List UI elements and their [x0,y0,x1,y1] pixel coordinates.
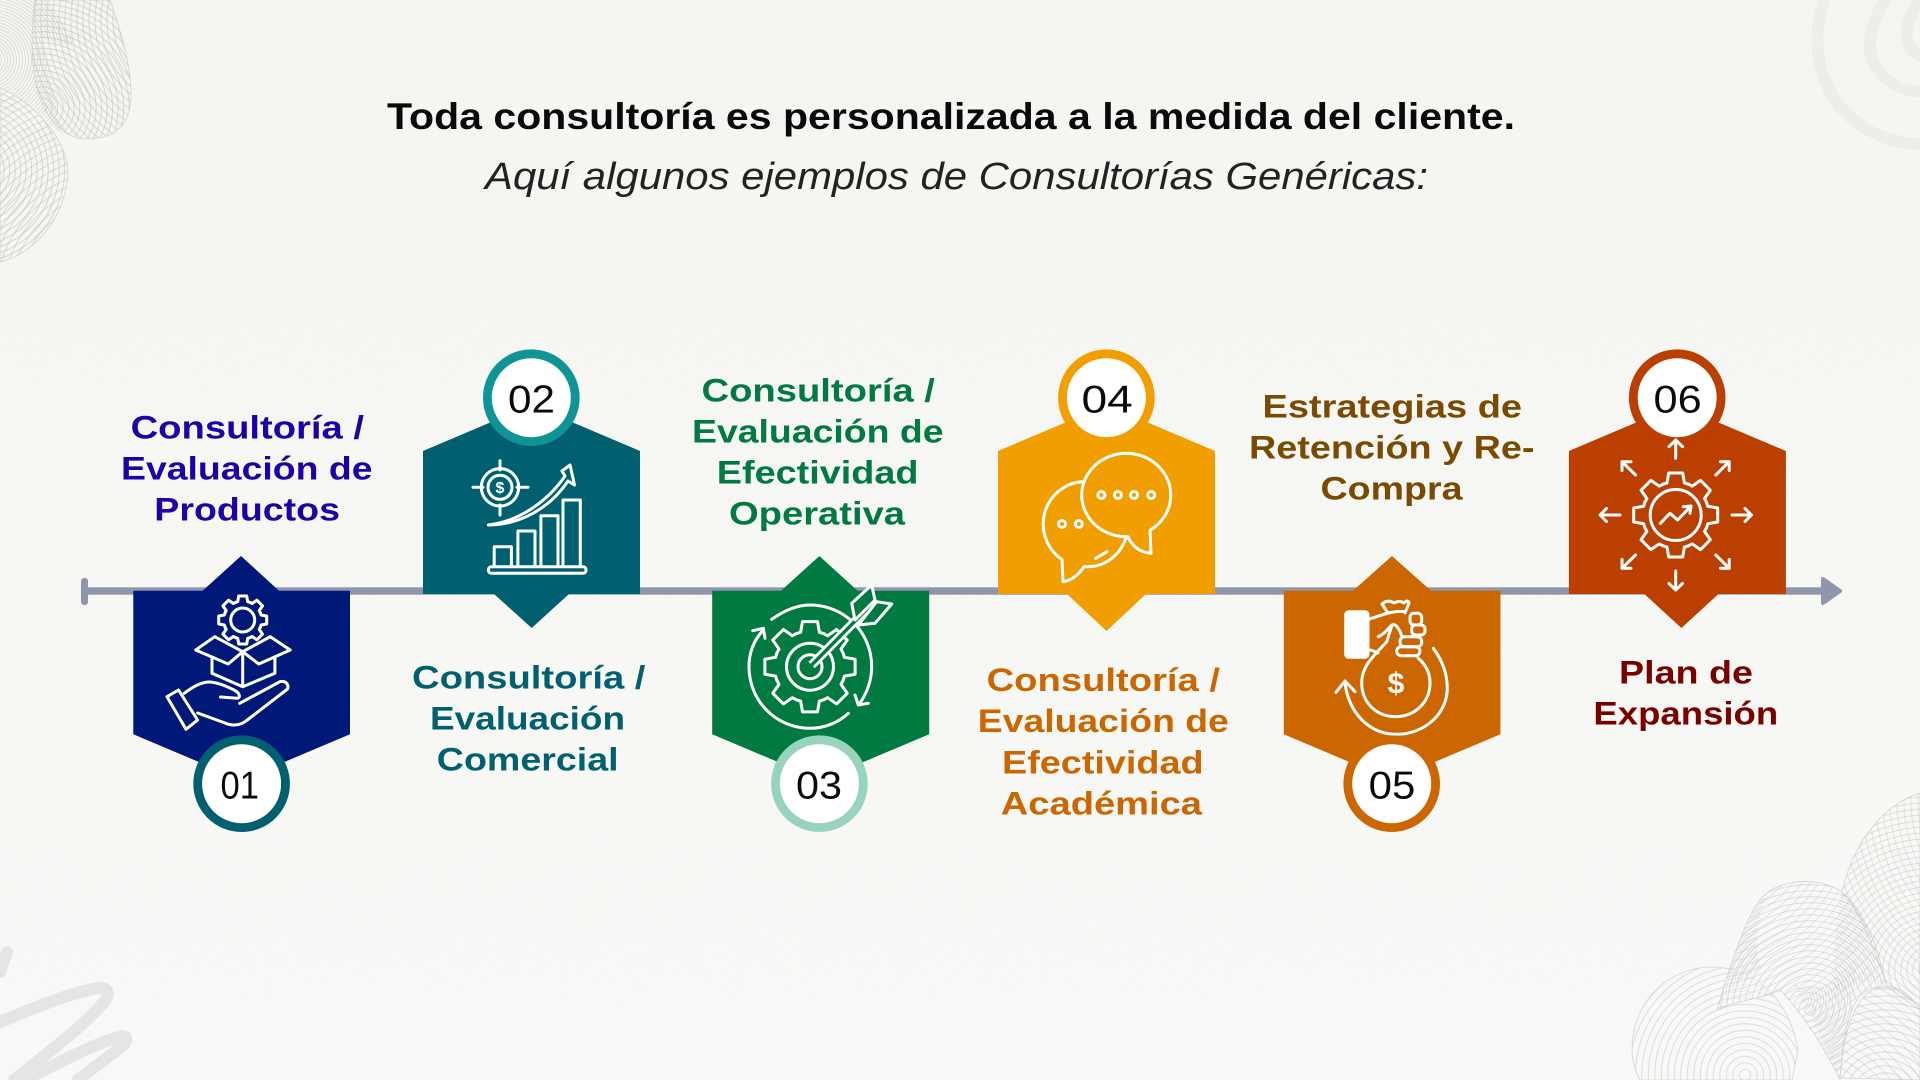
step 02 [412,354,646,777]
decoration: bottom-right wire mesh [1632,793,1920,1080]
step 04 [978,354,1229,821]
label 04: Consultoría / [987,662,1220,698]
label 01: Productos [154,491,340,527]
label 02: Comercial [437,741,619,777]
label 02: Evaluación [430,700,625,736]
label 01 [121,409,372,527]
label 03 [692,373,944,531]
number badge 03: 03 [796,765,842,808]
label 04: Académica [1001,785,1202,821]
number badge 02: 02 [508,379,555,422]
title: Toda consultoría es personalizada a la medida del cliente. [387,96,1515,137]
label 05: Compra [1320,470,1463,506]
number badge 05 [1348,740,1436,828]
decoration: bottom-left scribble [0,952,126,1080]
step 06 [1569,354,1786,731]
timeline arrow [81,578,1840,605]
label 06: Expansión [1593,695,1778,731]
icon: gear with growth line and outward arrows [1600,440,1751,590]
number badge 05: 05 [1369,765,1415,808]
label 03: Evaluación de [692,413,944,449]
icon: target and growth chart [473,461,586,573]
label 04: Efectividad [1002,744,1204,780]
label 04 [978,662,1229,821]
icon: hand holding money bag [1336,601,1447,734]
label 03: Efectividad [717,454,918,490]
icon: box, gear and hand [167,596,290,729]
icon: speech bubbles [1043,453,1171,582]
number badge 01 [198,740,286,828]
label 03: Consultoría / [702,373,935,409]
label 05: Estrategias de [1262,388,1522,424]
icon: gear target and arrow [749,585,892,728]
decoration: top-left wire mesh [0,0,131,262]
label 05: Retención y Re- [1249,429,1534,465]
label 01: Consultoría / [131,409,364,445]
label 02 [412,659,646,777]
number badge 04: 04 [1082,379,1133,422]
step 01 [121,409,372,828]
subtitle: Aquí algunos ejemplos de Consultorías Genéricas: [483,156,1428,198]
number badge 04 [1062,354,1150,442]
number badge 06: 06 [1654,379,1702,422]
label 06: Plan de [1619,654,1753,690]
number badge 03 [776,740,863,828]
number badge 02 [487,354,575,442]
label 05 [1249,388,1534,506]
step 05 [1249,388,1534,828]
step 03 [692,373,944,828]
decoration: top-right swirl [1817,0,1920,144]
label 01: Evaluación de [121,450,372,486]
label 06 [1593,654,1778,731]
icon: hand holding money bag: $ [1388,668,1405,700]
icon: target and growth chart: $ [496,480,505,497]
number badge 06 [1633,354,1721,442]
label 04: Evaluación de [978,703,1229,739]
label 02: Consultoría / [412,659,646,695]
number badge 01: 01 [220,765,259,808]
label 03: Operativa [729,495,905,531]
